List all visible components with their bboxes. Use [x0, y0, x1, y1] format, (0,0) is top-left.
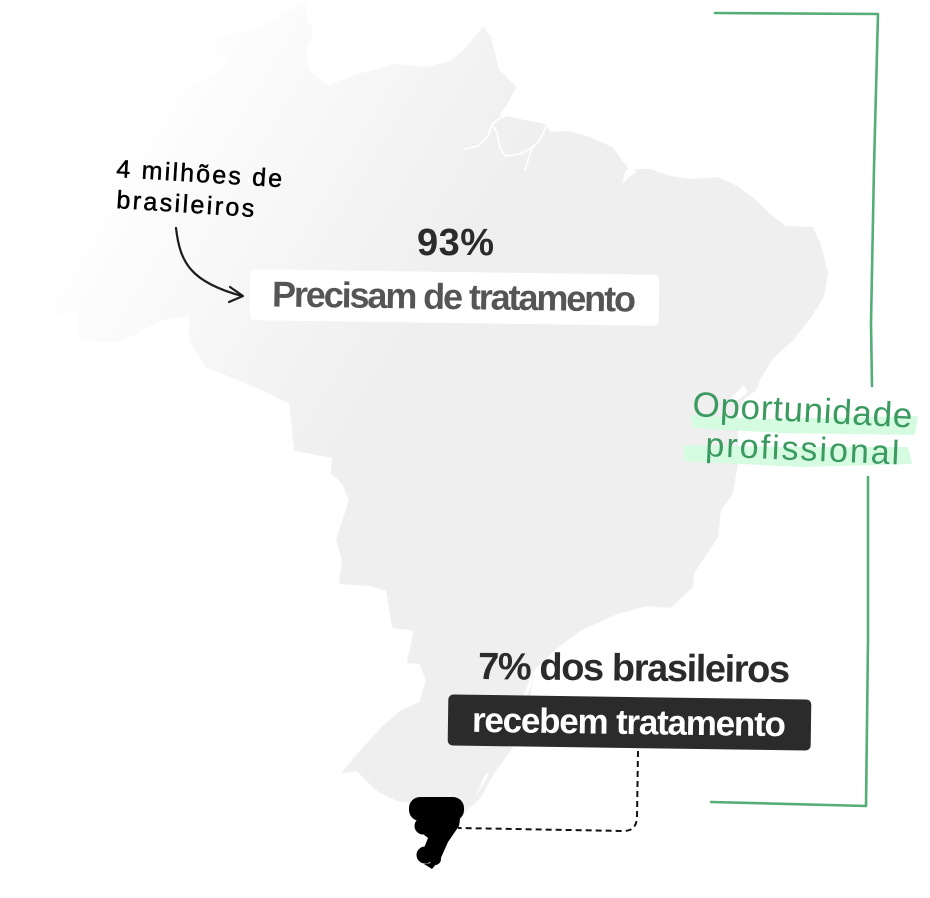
label: oportunidade profissional: profissional — [705, 426, 900, 472]
callout: 4 milhões de brasileiros: 4 milhões de — [116, 155, 283, 193]
label: recebem tratamento: recebem tratamento — [472, 701, 786, 744]
label: precisam de tratamento: Precisam de tratamento — [272, 273, 636, 320]
label: oportunidade profissional — [683, 385, 918, 472]
bracket: bottom segment — [711, 477, 868, 806]
stat: 7% dos brasileiros: 7% dos brasileiros — [478, 646, 790, 691]
callout: 4 milhões de brasileiros — [116, 155, 283, 223]
label: oportunidade profissional: Oportunidade — [692, 385, 913, 436]
dashed connector — [458, 751, 638, 831]
scribbled region in southern Brazil — [409, 797, 464, 869]
callout: 4 milhões de brasileiros: brasileiros — [116, 186, 255, 223]
label: recebem tratamento — [448, 694, 811, 751]
bracket: top segment — [715, 13, 878, 386]
arrow: callout to label — [176, 228, 243, 302]
stat: 93%: 93% — [417, 222, 494, 264]
map of Brazil — [30, 5, 827, 815]
